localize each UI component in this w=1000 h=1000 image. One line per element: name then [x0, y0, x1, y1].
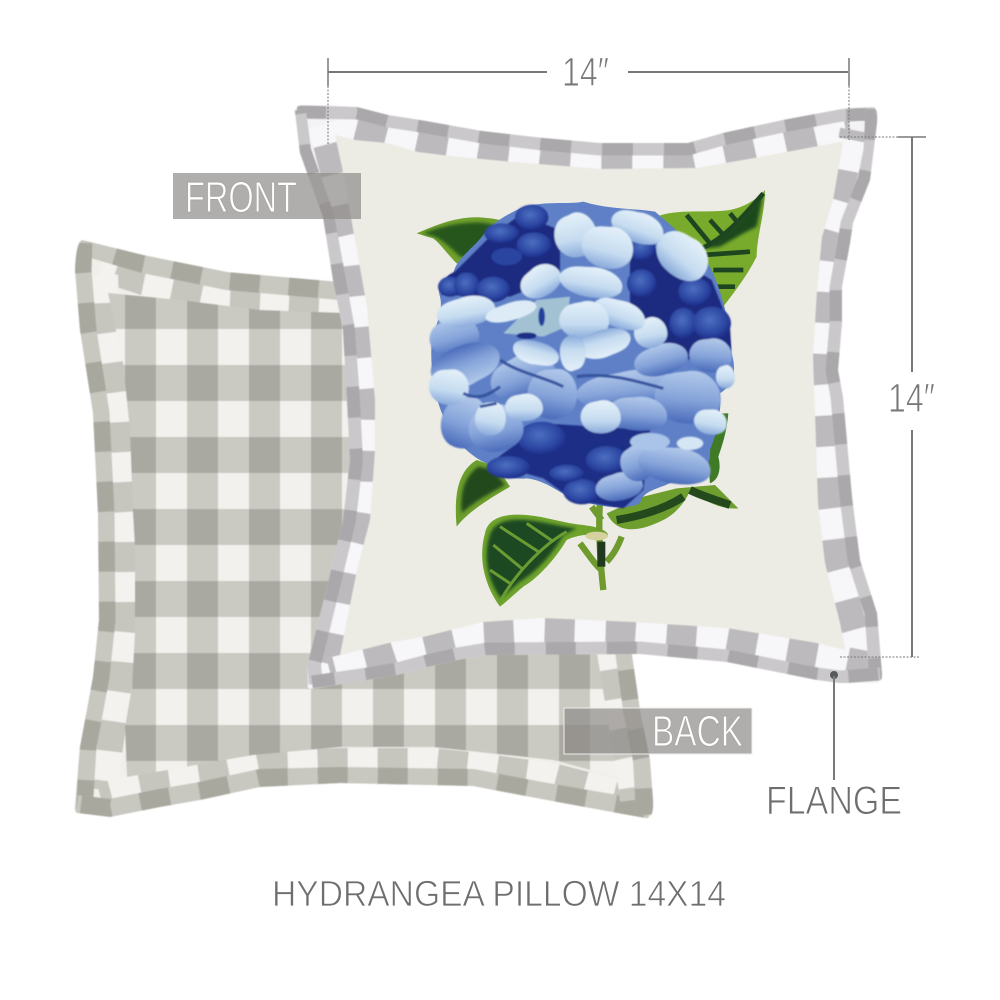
top dimension: 14 inches wide: 14″ — [562, 49, 609, 95]
leaves and stem — [417, 190, 765, 607]
front label: FRONT — [185, 173, 297, 222]
back label — [564, 707, 752, 756]
front pillow — [295, 105, 882, 689]
back pillow silhouette — [74, 240, 653, 818]
flange callout: FLANGE — [766, 779, 902, 823]
dark right florets — [627, 236, 732, 360]
dark bottom florets — [487, 422, 714, 508]
dark top-left florets — [438, 205, 560, 302]
pale centre petals — [463, 203, 718, 407]
top dimension: 14 inches wide — [328, 49, 849, 145]
right dimension: 14 inches high — [840, 137, 935, 657]
front pillow silhouette — [295, 105, 882, 689]
flower head silhouette — [431, 202, 734, 507]
mid-blue left petals — [425, 292, 581, 456]
front pillow linen panel — [335, 135, 845, 655]
hydrangea illustration — [417, 190, 765, 607]
mid-blue right petals — [575, 315, 735, 437]
back pillow checked panel — [108, 293, 617, 777]
back pillow flange — [77, 240, 650, 815]
back label: BACK — [652, 707, 743, 756]
front pillow flange — [297, 108, 880, 684]
flange callout — [766, 671, 902, 823]
title: HYDRANGEA PILLOW 14X14 — [272, 873, 726, 914]
back pillow — [74, 240, 653, 818]
right dimension: 14 inches high: 14″ — [888, 375, 935, 421]
